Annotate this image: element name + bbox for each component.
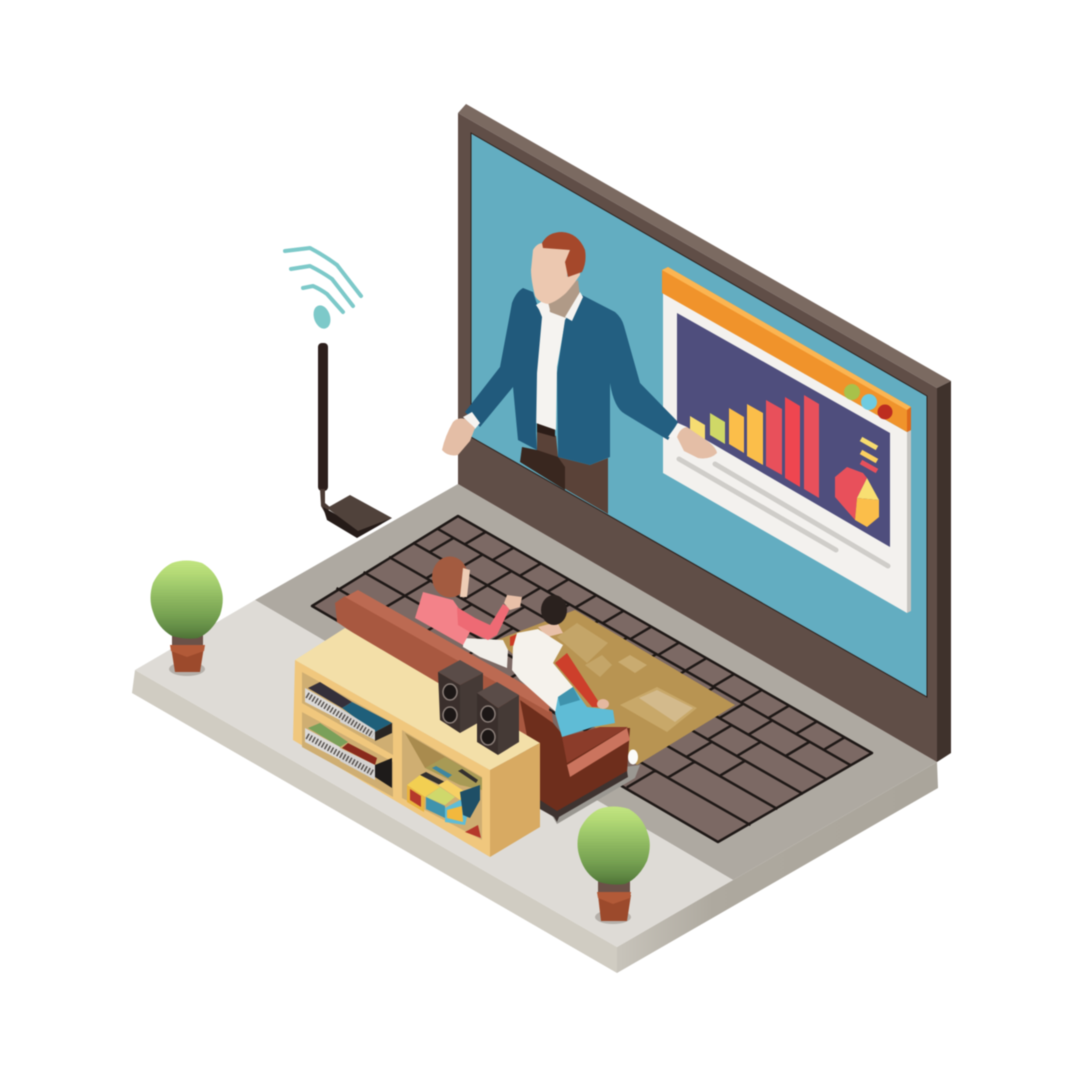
collar (536, 292, 583, 321)
soil (172, 633, 203, 650)
foliage (578, 806, 650, 885)
shelf front (293, 660, 490, 857)
window side (907, 430, 911, 613)
face (460, 568, 470, 597)
text placeholder lines (679, 459, 888, 566)
base left side face (132, 670, 617, 973)
hair (541, 595, 567, 625)
wifi arc outer (285, 248, 361, 296)
lower left compartment (302, 712, 393, 797)
screen top edge (458, 104, 951, 388)
right hand (677, 427, 717, 458)
face (531, 243, 580, 304)
potted plant left (150, 560, 223, 676)
antenna rod (318, 343, 328, 491)
hair (432, 556, 468, 598)
title bar highlight (662, 267, 911, 410)
jacket left (465, 288, 542, 450)
pot shadow (595, 910, 631, 924)
rug (497, 610, 735, 765)
foliage (150, 560, 223, 639)
rug patches (557, 623, 697, 732)
usb dongle top (327, 495, 392, 531)
jeans shadow (558, 687, 580, 706)
dark trouser leg (520, 447, 565, 490)
pot (171, 647, 204, 672)
white trousers (463, 638, 508, 668)
sofa shadow (540, 765, 640, 824)
usb dongle side (323, 507, 392, 538)
pink arm (457, 604, 510, 640)
speaker front (477, 693, 498, 755)
hand (597, 699, 609, 709)
chart legend (861, 439, 877, 471)
soil (598, 880, 630, 896)
upper left compartment (302, 672, 393, 755)
neck (547, 280, 580, 318)
presenter (442, 232, 717, 514)
sofa seat (562, 727, 628, 763)
pie chart (835, 467, 879, 527)
shoe (628, 750, 638, 764)
laptop screen (458, 104, 951, 762)
pot rim (170, 645, 205, 657)
title bar end (907, 407, 911, 432)
pink top (415, 592, 470, 645)
blue display (471, 133, 927, 697)
left sleeve (510, 632, 522, 646)
stereo boxes lower (305, 723, 392, 788)
wifi dot (311, 303, 333, 331)
shirt (512, 629, 573, 713)
books in right compartment (407, 757, 482, 838)
sofa outer backrest face (335, 596, 553, 760)
shirt (536, 305, 570, 430)
shelf right side (490, 743, 540, 857)
speaker top (438, 660, 483, 685)
base light floor (135, 600, 733, 947)
pot shadow (169, 662, 205, 676)
sofa (335, 590, 640, 824)
left hand (442, 418, 475, 455)
potted plant right (578, 806, 650, 924)
sofa top band (345, 590, 550, 712)
right compartment (402, 730, 482, 840)
presentation window (662, 267, 911, 613)
pot (598, 895, 631, 921)
orange title bar (662, 267, 911, 432)
sofa arm top (567, 728, 630, 777)
right compartment shadow (405, 733, 482, 782)
neck (538, 622, 563, 637)
shelf unit (293, 628, 540, 857)
key grid (308, 516, 872, 842)
keyboard plate (312, 516, 872, 842)
shelf top (295, 628, 540, 770)
base right side face (617, 762, 938, 973)
antenna joint (320, 489, 331, 513)
jeans (555, 687, 615, 737)
keyboard (308, 516, 872, 842)
screen side edge (937, 381, 951, 762)
speaker cones (481, 706, 495, 745)
window buttons (844, 384, 892, 420)
belt (537, 423, 555, 437)
wifi arc middle (291, 266, 353, 306)
rug surface (497, 610, 735, 765)
laptop base (132, 484, 938, 973)
hand (504, 595, 522, 610)
speaker side (498, 695, 519, 755)
man on sofa (510, 595, 638, 764)
jacket right (557, 295, 678, 465)
right cuff (668, 423, 687, 438)
base top grey deck (255, 484, 937, 880)
bar chart (690, 395, 819, 498)
speaker left (438, 660, 483, 733)
speaker front (438, 672, 460, 733)
speaker cones (443, 684, 457, 723)
stereo boxes upper (305, 682, 392, 741)
wifi arc inner (303, 286, 343, 312)
hair (542, 232, 586, 277)
window panel (663, 293, 907, 613)
speaker right (477, 682, 519, 755)
red sleeve (555, 653, 602, 707)
speaker side (460, 673, 483, 733)
pot rim (597, 892, 631, 904)
icon: wifi signal (285, 248, 361, 331)
antenna (318, 343, 392, 538)
dark chart area (677, 313, 890, 547)
woman on sofa (415, 556, 522, 668)
screen bezel (458, 113, 937, 762)
trousers (537, 430, 608, 514)
left cuff (463, 412, 480, 429)
sofa end body (520, 700, 630, 813)
speaker top (477, 682, 519, 708)
sofa base (540, 771, 628, 822)
